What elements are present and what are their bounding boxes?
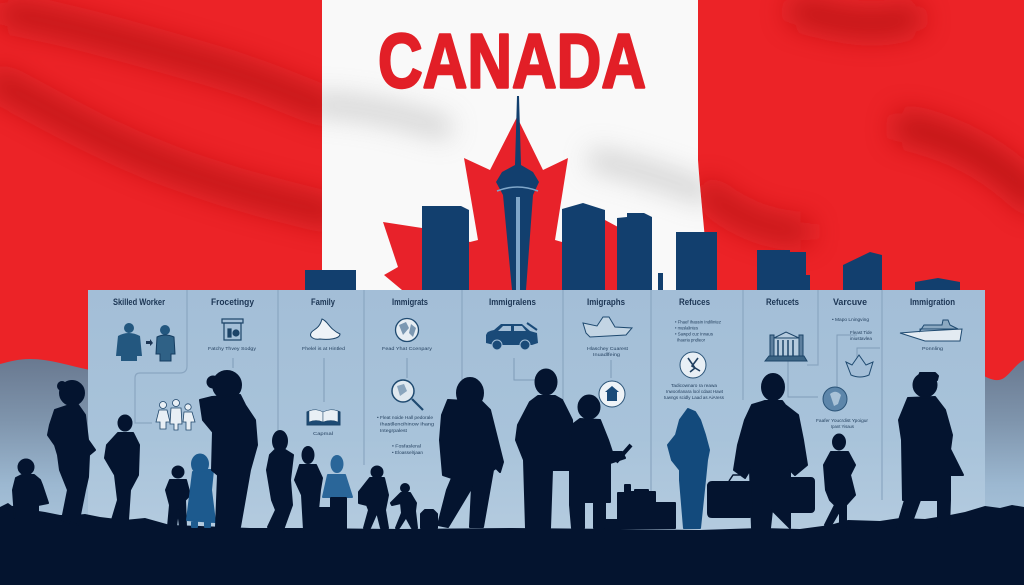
text: medal caption: Faafer Youcrdist Ypoigur [816,418,868,423]
text block: refugee bullets: • muslalintes [675,326,699,330]
text: Mapo Lningving: • Mapo Lningving [832,317,869,322]
icon: crown [846,355,873,377]
heading: Varcuve: Varcuve [833,297,867,307]
icon: family group outline [156,400,195,430]
text: medal caption: Ipant Yisaus [831,424,855,429]
icon: parliament building [765,332,807,361]
figure: child left [13,460,48,518]
heading: Immigralens: Immigralens [489,297,536,307]
heading: Immigration: Immigration [910,297,955,307]
figure: man with suitcases [708,374,814,528]
icon: luggage stack [605,485,675,528]
title: CANADA [378,18,646,104]
figure: woman with hat and bag [897,373,963,527]
heading: Refucets: Refucets [766,297,799,307]
figure: woman on phone [267,431,293,530]
text block: magnifier notes: • Fleat noide Hall pedorale [377,415,433,420]
icon: circled figure [680,352,706,378]
icon: CN tower [496,96,539,290]
figure: large person [438,378,503,527]
text block: refugee bullets: Ihaeria pndieor [677,338,705,342]
figure: kid with backpack [359,466,388,528]
text block: refugee notes [664,383,725,400]
text: Fleast Tide: Fleast Tide [850,330,872,335]
text: Fhelel is at Hintled: Fhelel is at Hintled [302,346,345,351]
text block: magnifier notes: Ihastllencihinow Ihang [380,422,435,426]
icon: car [486,323,538,350]
flag: Canadian flag with red bands and white centre [0,0,1024,380]
text block: refugee notes: tuwngs scidly Laad as AiAress [664,395,725,400]
heading: Immigrats: Immigrats [392,297,428,307]
text block: refugee notes: Inwoorlanara lool cdaat Hawt [666,389,724,394]
text block: refugee bullets: • Sawpd cuz Innaus [675,332,714,336]
text: boat caption [587,346,629,357]
figure: blue person [323,456,352,497]
ground with grass [0,503,1024,585]
text: boat caption: Hlaschey Cuarest [587,346,629,351]
figure: man centre [516,370,574,528]
heading: Skilled Worker: Skilled Worker [113,297,165,307]
icon: globe [396,318,418,342]
figure: blue person trousers [331,498,346,530]
icon: open book [307,410,340,425]
figure: woman with book [570,396,631,528]
icon: box [421,510,437,528]
figure: woman with bun [48,381,95,525]
icon: magnifier globe [392,380,423,410]
heading: Imigraphs: Imigraphs [587,297,625,307]
icon: house circle [599,381,625,407]
icon: document box [222,319,243,340]
text block: refugee bullets: • Fhaef Ihassin Indilintez [675,320,722,324]
figure: blue woman [187,454,215,527]
text: medal caption [816,418,868,429]
text: Fleast Tide [850,330,872,341]
people silhouettes [13,370,963,530]
figure: small walking child [391,484,417,528]
figure: child on phone [824,434,855,527]
text block: magnifier notes: • Eloasselrjaan [392,450,423,455]
figure: blue woman standing [668,409,709,528]
text: Fatchy Thvey Sodgy: Fatchy Thvey Sodgy [208,346,257,351]
icon: maple leaf [383,117,618,290]
figure: large woman with child [200,371,257,527]
icon: cruise ship [900,320,962,341]
text: Ponnling: Ponnling [922,346,944,351]
icon: two workers [116,323,175,361]
text block: refugee notes: Tadicownaro ra reawa [671,383,717,388]
figure: small child [166,466,190,527]
figure: man [105,416,139,520]
icon: boat [583,317,632,337]
text block: refugee bullets [675,320,722,342]
city skyline [305,96,960,290]
text: Fleast Tide: iniustavlea [850,336,872,341]
panel: immigration information board [88,290,985,535]
heading: Family: Family [311,297,335,307]
text: Fead Yhat Ccenpary: Fead Yhat Ccenpary [382,346,433,351]
figure: person with bag [295,447,332,530]
icon: medal circle [823,387,847,411]
text block: magnifier notes [377,415,435,455]
text: boat caption: Inuadlfeing [593,352,621,357]
icon: family hands [311,319,340,339]
text: Capmal: Capmal [313,431,333,436]
text block: magnifier notes: • Fosfasleral [392,444,421,448]
background sky below flag [0,350,1024,530]
heading: Refuces: Refuces [679,297,710,307]
heading: Frocetingy: Frocetingy [211,297,254,307]
text block: magnifier notes: Integrpalest [380,428,408,433]
